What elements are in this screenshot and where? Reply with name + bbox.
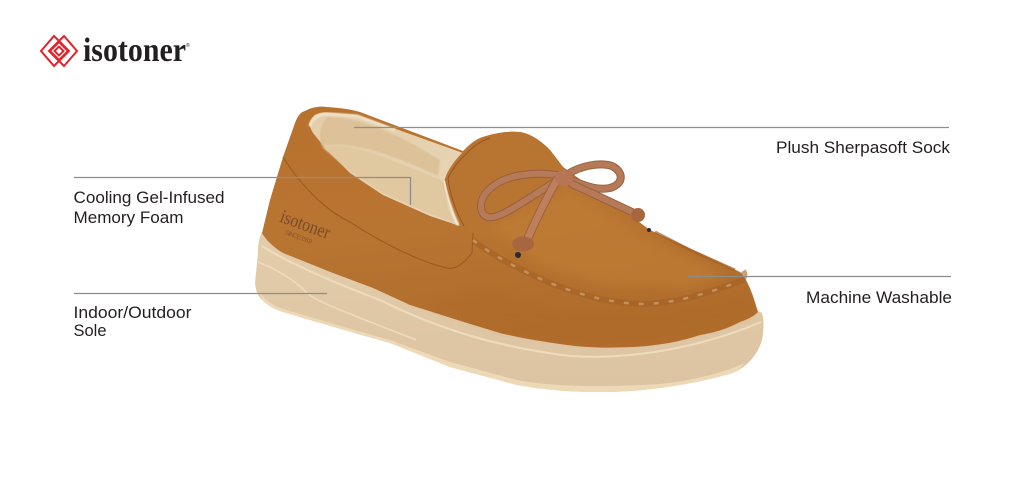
leader line <box>74 178 410 205</box>
label: Machine Washable <box>806 289 952 307</box>
tongue <box>445 132 600 240</box>
sole <box>255 232 764 392</box>
lace tips <box>515 252 521 258</box>
vamp highlight <box>490 190 725 288</box>
moccasin stitches <box>473 240 738 304</box>
right lace tail <box>572 184 632 212</box>
left lace loop <box>481 174 560 217</box>
slipper illustration <box>255 107 764 392</box>
moccasin seam <box>473 240 744 304</box>
heel logo <box>275 206 334 251</box>
wordmark: isotoner <box>83 32 186 69</box>
callout: Cooling Gel-Infused Memory Foam <box>74 178 410 227</box>
lace end left <box>512 236 534 252</box>
lace knot <box>555 170 573 186</box>
heel logo tagline: SINCE 1919 <box>284 229 313 246</box>
registered mark: ® <box>186 42 190 49</box>
toe stitch line <box>655 232 735 270</box>
sole welt line <box>262 246 761 357</box>
sole curved highlight <box>258 262 416 340</box>
right lace loop <box>568 164 621 189</box>
leader line <box>74 292 327 294</box>
logo: isotoner <box>41 32 190 69</box>
lining pile shading <box>320 117 440 176</box>
callout: Indoor/Outdoor Sole: Sole <box>74 322 106 340</box>
heel logo wordmark: isotoner <box>277 206 334 244</box>
leader line <box>354 126 949 128</box>
insole <box>322 146 457 224</box>
lower lace tail <box>527 180 557 240</box>
sole lower band <box>258 288 745 392</box>
collar seam <box>283 157 473 268</box>
callout: Cooling Gel-Infused Memory Foam: Memory Foam <box>74 209 184 227</box>
opening: sherpa lining <box>309 112 463 226</box>
lace bow <box>481 164 632 240</box>
lining right highlight <box>444 180 458 225</box>
icon: red diamond mark <box>41 36 77 66</box>
leader line <box>688 276 951 278</box>
lace end right <box>631 208 645 222</box>
tongue edge seam <box>448 138 490 226</box>
label: Cooling Gel-Infused <box>74 189 224 207</box>
lining rim highlight <box>310 114 395 130</box>
upper <box>262 107 758 348</box>
callout: Indoor/Outdoor Sole <box>74 294 327 340</box>
label: Indoor/Outdoor <box>74 304 192 322</box>
toe shadow <box>430 285 752 342</box>
label: Plush Sherpasoft Sock <box>776 139 951 157</box>
